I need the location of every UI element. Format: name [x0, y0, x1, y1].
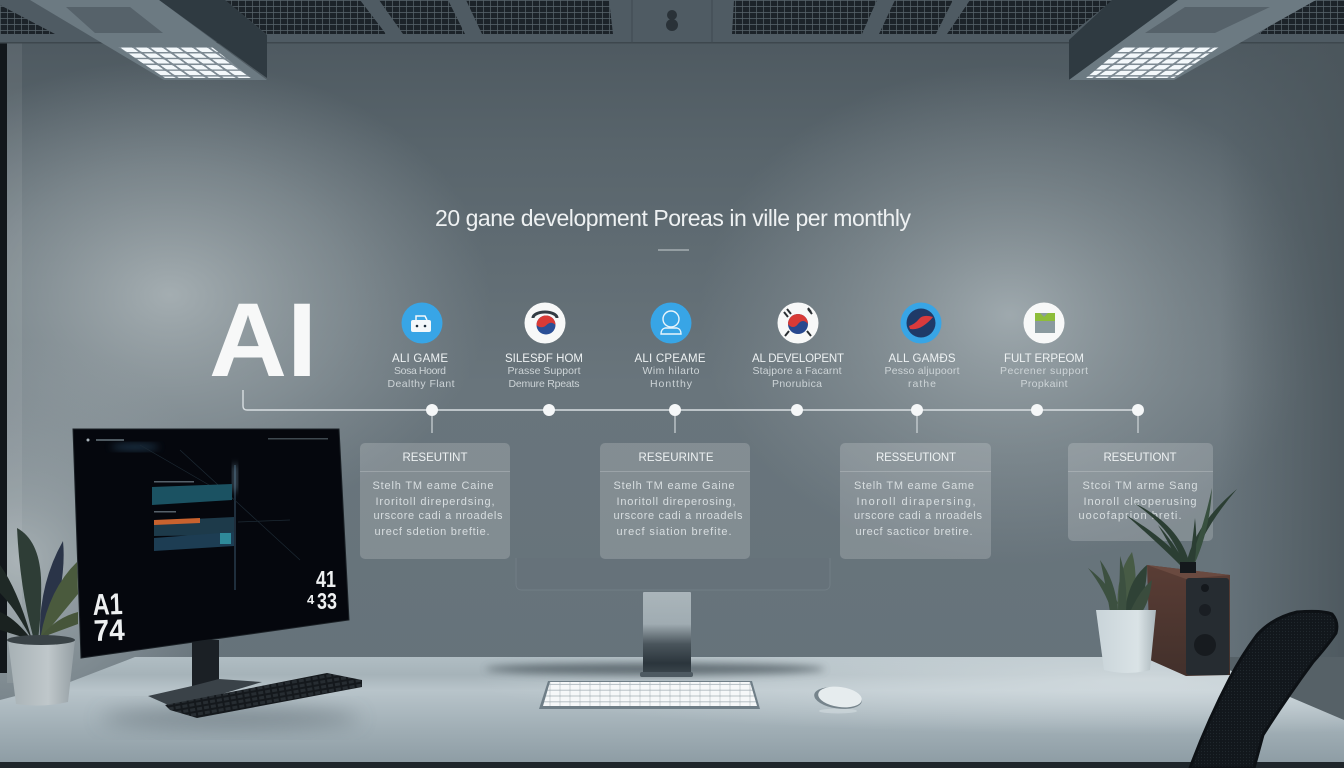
office chair: [1190, 611, 1337, 768]
step 3: AI creative: Wim hilarto: [642, 365, 700, 377]
card 2: RESEURINTE: [638, 452, 714, 464]
ceiling with grilles: [0, 0, 1344, 44]
step 6: full freedom: FULT ERPEOM: [1004, 353, 1084, 365]
step 4: AI development: Pnorubica: [772, 378, 822, 390]
card 1: Iroritoll direperdsing,: [376, 496, 494, 508]
centre monitor stand: [640, 592, 693, 677]
card 2: urecf siation brefite.: [616, 526, 732, 538]
desk: [0, 657, 1344, 768]
leaves: [0, 528, 78, 640]
card 3: urecf sacticor bretire.: [856, 526, 972, 538]
card 3: [840, 443, 991, 559]
card 3: RESSEUTIONT: [876, 452, 956, 464]
white keyboard: [539, 681, 760, 709]
icon: taegeuk badge: [524, 302, 566, 344]
card 3: Stelh TM eame Game: [854, 480, 974, 492]
step 1: AI game: [388, 302, 455, 390]
card 1: [360, 443, 510, 559]
step 5: all games: ALL GAMĐS: [888, 353, 956, 365]
monitor stand: [148, 640, 262, 708]
screen glow lines: [111, 444, 300, 590]
step 3: AI creative: [634, 302, 706, 390]
icon: bot outline: [650, 302, 692, 344]
card 2: [600, 443, 750, 559]
screen: [73, 429, 349, 658]
ceiling light left: [30, 0, 267, 80]
speaker plant: [1126, 488, 1237, 573]
step 4: AI development: [752, 302, 844, 390]
screen content panels: [152, 481, 234, 551]
left plant: [0, 528, 78, 706]
pot: [1096, 610, 1156, 673]
card 3: urscore cadi a nroadels: [854, 510, 982, 522]
left monitor: 33: [317, 588, 337, 614]
step 5: all games: rathe: [908, 378, 936, 390]
step 1: AI game: ALI GAME: [392, 353, 448, 365]
leaves: [1126, 488, 1237, 565]
step 2: flag badge: Demure Rpeats: [508, 378, 580, 390]
card 2: urscore cadi a nroadels: [614, 510, 743, 522]
step 1: AI game: Sosa Hoord: [394, 365, 446, 377]
icon: game box: [402, 302, 442, 344]
card 4: Inoroll cleoperusing: [1084, 496, 1196, 508]
step 4: AI development: Stajpore a Facarnt: [752, 365, 842, 377]
timeline: [243, 390, 1144, 433]
step 3: AI creative: Hontthy: [650, 378, 693, 390]
card 4: RESEUTIONT: [1104, 452, 1176, 464]
title divider: [658, 250, 689, 251]
card 4: [1068, 443, 1213, 541]
card 2: Stelh TM eame Gaine: [614, 480, 734, 492]
title: 20 gane development Poreas in ville per monthly: [435, 205, 912, 231]
leaves: [1088, 552, 1152, 612]
card 1: urecf sdetion breftie.: [374, 526, 490, 538]
icon: blue globe badge: [900, 302, 942, 344]
pot: [8, 640, 75, 706]
mouse: [813, 684, 863, 714]
step 4: AI development: AL DEVELOPENT: [752, 353, 844, 365]
step 5: all games: [884, 302, 960, 390]
step 6: full freedom: Propkaint: [1020, 378, 1068, 390]
screen stat right: 41: [316, 566, 336, 592]
card 4: uocofaprion breti.: [1078, 510, 1182, 522]
icon: flag badge: [778, 302, 818, 344]
pot: [1180, 562, 1196, 573]
step 1: AI game: Dealthy Flant: [388, 378, 455, 390]
large faint display panel: [515, 558, 830, 590]
step 5: all games: Pesso aljupoort: [884, 365, 960, 377]
step 6: full freedom: Pecrener support: [1000, 365, 1088, 377]
left monitor: [73, 429, 349, 708]
step 6: full freedom: [1000, 302, 1088, 390]
card 3: Inoroll dirapersing,: [856, 496, 976, 508]
desk plant: [1088, 552, 1156, 673]
screen top bar: [86, 438, 328, 442]
screen stat left: A1: [92, 588, 123, 622]
screen stat prefix: 4: [307, 592, 315, 607]
icon: green document badge: [1024, 302, 1064, 344]
card 2: Inoritoll direperosing,: [616, 496, 736, 508]
step 2: flag badge: SILESĐF HOM: [505, 353, 583, 365]
step 3: AI creative: ALI CPEAME: [634, 353, 706, 365]
AI wordmark: AI: [209, 282, 317, 399]
card 4: Stcoi TM arme Sang: [1082, 480, 1198, 492]
card 1: RESEUTINT: [402, 452, 468, 464]
step 2: flag badge: [505, 302, 583, 390]
black keyboard: [165, 673, 362, 718]
left monitor: 74: [93, 614, 126, 648]
card 1: urscore cadi a nroadels: [374, 510, 503, 522]
step 2: flag badge: Prasse Support: [508, 365, 581, 377]
card 1: Stelh TM eame Caine: [372, 480, 494, 492]
speaker: [1147, 565, 1230, 676]
ceiling light right: [1069, 0, 1316, 80]
